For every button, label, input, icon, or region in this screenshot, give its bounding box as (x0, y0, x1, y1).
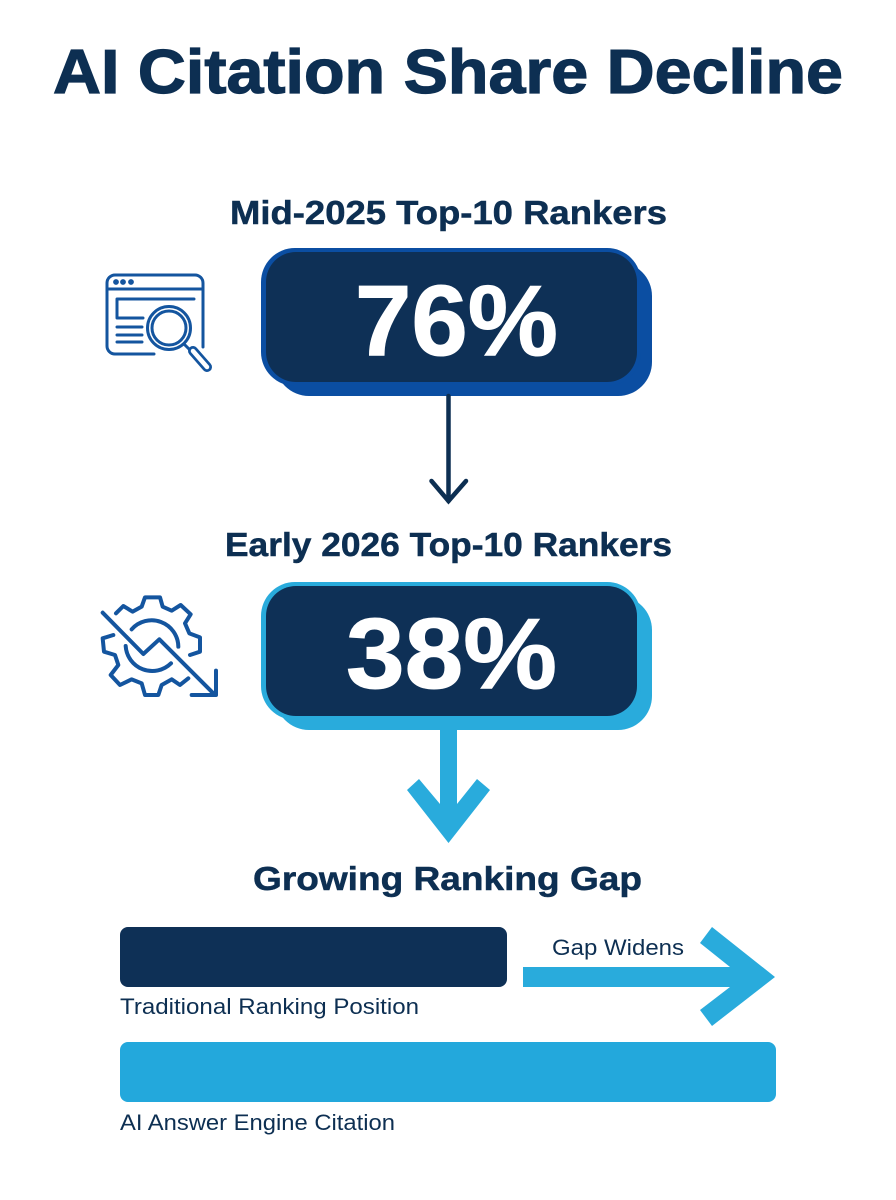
stat card: 76% (261, 248, 652, 396)
title: AI Citation Share Decline (53, 38, 843, 107)
value: 38%: 38% (346, 598, 557, 710)
label: ai answer engine citation: AI Answer Engine Citation (120, 1110, 395, 1135)
value: 76%: 76% (355, 265, 558, 377)
label: traditional ranking position: Traditional Ranking Position (120, 994, 419, 1019)
icon: gear with declining arrow (103, 597, 216, 695)
heading: growing ranking gap: Growing Ranking Gap (253, 860, 642, 897)
heading: early 2026: Early 2026 Top-10 Rankers (225, 526, 672, 563)
arrow: thin down arrow (432, 396, 466, 501)
stat card: 38% (261, 582, 652, 730)
arrow: thick down arrow (407, 730, 490, 843)
arrow: gap widens (523, 927, 775, 1026)
bar: traditional ranking position (120, 927, 507, 987)
bar: ai answer engine citation (120, 1042, 776, 1102)
heading: mid-2025: Mid-2025 Top-10 Rankers (230, 194, 667, 231)
icon: browser window with magnifier (107, 275, 207, 367)
label: gap widens: Gap Widens (552, 935, 684, 960)
